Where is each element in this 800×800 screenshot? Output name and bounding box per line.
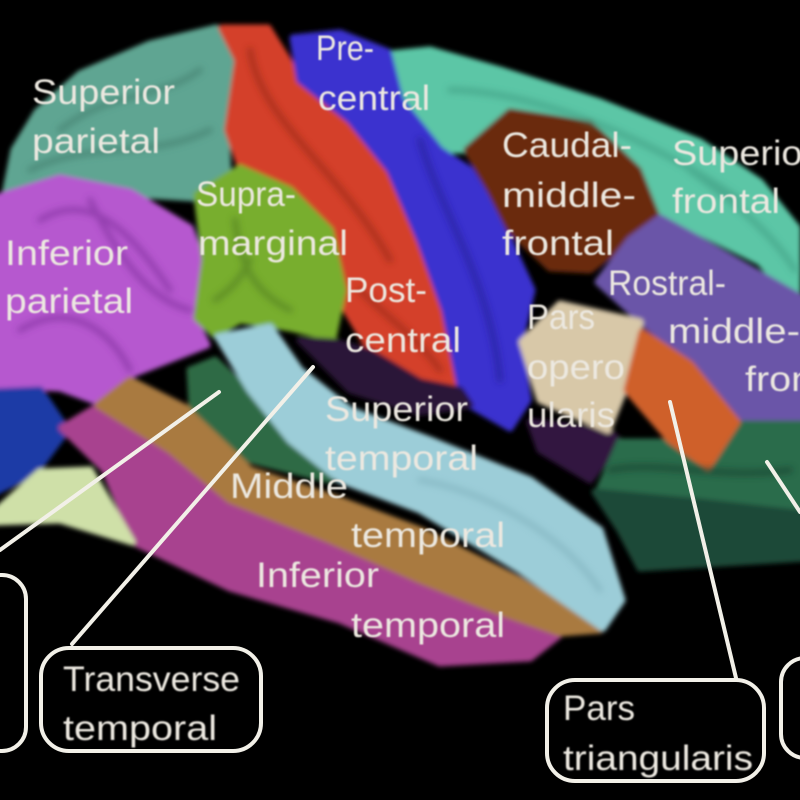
label: middle temporal	[230, 467, 505, 555]
region: dark insula fold	[300, 340, 470, 412]
label: post-central: Post-	[345, 271, 427, 310]
label: transverse temporal: temporal	[63, 709, 217, 748]
label: caudal middle frontal	[502, 126, 636, 263]
label: pars opercularis: ularis	[527, 396, 615, 435]
region: parietal blue	[0, 390, 67, 492]
region: supramarginal	[197, 168, 343, 338]
region: superior parietal	[5, 28, 236, 198]
brain surface regions	[0, 28, 800, 663]
label box: pars triangularis	[547, 680, 764, 781]
label: post-central	[345, 271, 461, 360]
label box: cropped right	[781, 658, 800, 758]
label box: transverse temporal	[41, 648, 261, 751]
label: supramarginal: Supra-	[196, 175, 296, 214]
label: rostral middle frontal: middle-	[668, 312, 800, 351]
label: caudal middle frontal: middle-	[502, 176, 636, 215]
label: pre-central: Pre-	[316, 29, 374, 68]
label: superior frontal: frontal	[672, 182, 780, 221]
label: caudal middle frontal: Caudal-	[502, 126, 632, 165]
region: superior frontal	[390, 50, 797, 305]
label: pre-central: central	[318, 79, 430, 118]
region: pre-central	[293, 33, 532, 428]
label: inferior temporal	[256, 556, 505, 645]
region: pars opercularis	[522, 304, 640, 430]
arrow: to transverse temporal label	[72, 367, 313, 644]
label: inferior parietal: Inferior	[5, 234, 128, 273]
label: transverse temporal	[63, 660, 240, 748]
label: middle temporal: temporal	[351, 516, 505, 555]
label: pars triangularis: Pars	[563, 689, 635, 728]
label: superior parietal: parietal	[32, 122, 160, 161]
region: temporal pole pale green	[0, 470, 132, 542]
label: pars opercularis	[527, 298, 625, 435]
region: inferior temporal	[62, 408, 558, 663]
label: rostral middle frontal	[608, 264, 800, 399]
label: superior temporal: Superior	[325, 390, 468, 429]
label: transverse temporal: Transverse	[63, 660, 240, 699]
label: rostral middle frontal: Rostral-	[608, 264, 726, 303]
label: inferior temporal: temporal	[351, 606, 505, 645]
region: middle temporal	[98, 380, 600, 633]
label: inferior parietal	[5, 234, 133, 321]
label: pars opercularis: opero	[527, 348, 625, 387]
region: transverse temporal	[190, 360, 330, 480]
label: middle temporal: Middle	[230, 467, 348, 506]
label: superior temporal	[325, 390, 478, 478]
label: superior parietal	[32, 73, 175, 161]
label: pars opercularis: Pars	[527, 298, 595, 337]
region: pars triangularis	[627, 332, 737, 467]
label: superior temporal: temporal	[325, 439, 478, 478]
region: caudal middle frontal	[467, 112, 656, 270]
arrow: to far-left label	[0, 392, 219, 550]
region: lateral orbitofrontal	[600, 424, 800, 510]
region: pars orbitalis	[530, 422, 620, 480]
label: supramarginal: marginal	[198, 224, 348, 263]
label box: cropped left	[0, 575, 26, 751]
region: lower frontal	[595, 492, 800, 568]
label: pars triangularis	[563, 689, 753, 778]
region: rostral middle frontal	[598, 218, 800, 420]
region: superior temporal	[218, 327, 622, 628]
sulcal fold shading	[20, 50, 795, 590]
label: pars triangularis: triangularis	[563, 739, 753, 778]
label: inferior temporal: Inferior	[256, 556, 379, 595]
arrow: to far-right label	[767, 462, 800, 512]
label: supramarginal	[196, 175, 348, 263]
region: post-central	[222, 28, 460, 383]
leader lines	[0, 367, 800, 678]
region: inferior parietal	[0, 178, 207, 412]
label: caudal middle frontal: frontal	[502, 224, 614, 263]
label: superior frontal	[672, 134, 800, 221]
label: superior parietal: Superior	[32, 73, 175, 112]
arrow: to pars triangularis label	[670, 402, 736, 678]
label boxes	[0, 575, 800, 781]
label: pre-central	[316, 29, 430, 118]
label: inferior parietal: parietal	[5, 282, 133, 321]
label: post-central: central	[345, 321, 461, 360]
